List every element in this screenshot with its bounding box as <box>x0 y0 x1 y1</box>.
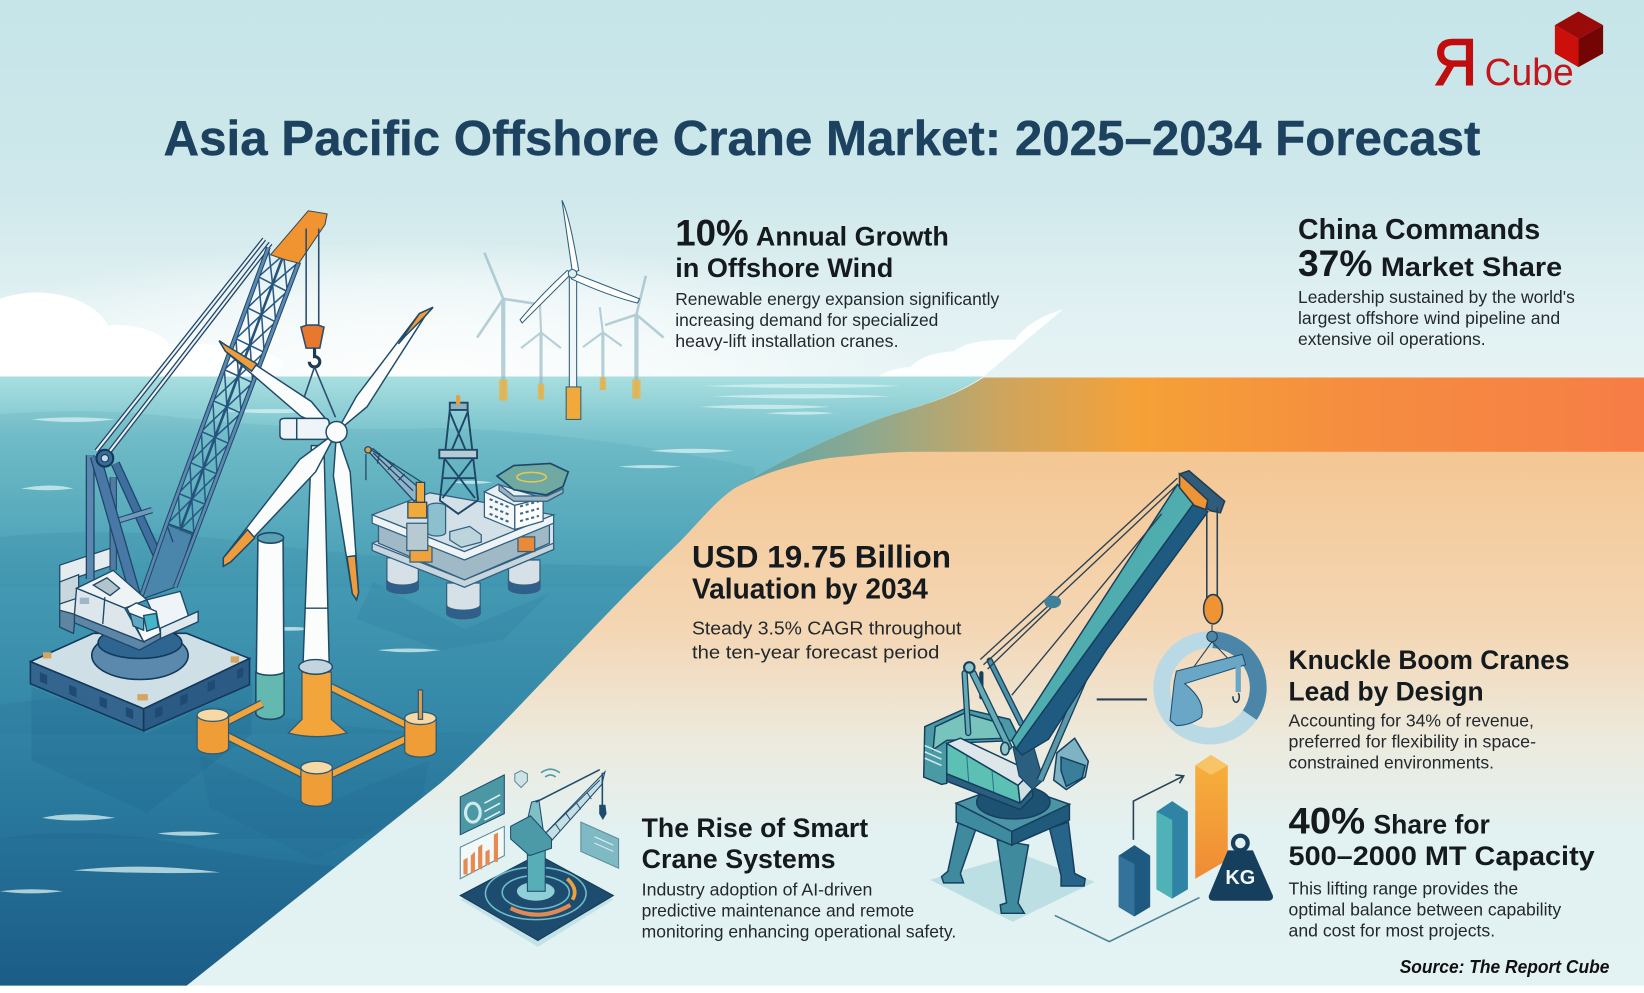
knuckle boom crane <box>924 471 1258 922</box>
stat: smart cranes <box>642 812 956 941</box>
hook block <box>1204 595 1223 624</box>
stat: knuckle boom: preferred for flexibility in space- <box>1289 732 1536 752</box>
stat: China share: China Commands <box>1298 213 1540 245</box>
stat: offshore wind growth: Annual Growth <box>756 220 949 251</box>
connector line <box>1097 698 1147 700</box>
sea <box>0 376 983 986</box>
logo cube <box>1555 12 1603 67</box>
helideck <box>497 463 568 501</box>
stay cables <box>980 478 1177 695</box>
stat: capacity share: optimal balance between capability <box>1289 899 1561 919</box>
stat: knuckle boom <box>1289 644 1570 773</box>
stat: China share: 37% <box>1298 243 1372 284</box>
floating foundation <box>197 672 436 806</box>
smart crane body <box>511 770 606 856</box>
boom strut <box>1040 664 1090 780</box>
standing tower section <box>256 533 284 719</box>
smart crane icon <box>460 769 619 947</box>
boom tip <box>271 211 327 263</box>
stat: valuation <box>692 539 962 663</box>
A-frame <box>90 450 172 599</box>
weight icon <box>1209 836 1273 901</box>
status panel <box>581 822 619 868</box>
stat: smart cranes: The Rise of Smart <box>642 812 868 843</box>
stat: knuckle boom: Lead by Design <box>1289 675 1484 706</box>
stat: China share <box>1298 213 1575 349</box>
stat: offshore wind growth <box>675 212 999 351</box>
wifi icon <box>541 769 560 777</box>
platform legs <box>387 558 540 619</box>
weight icon: KG <box>1225 867 1255 889</box>
stat: smart cranes: predictive maintenance and remote <box>642 900 914 920</box>
stat: valuation: Valuation by 2034 <box>692 573 928 605</box>
stat: capacity share: 500–2000 MT Capacity <box>1289 840 1596 871</box>
stat: China share: Leadership sustained by the world's <box>1298 287 1575 307</box>
stat: offshore wind growth: increasing demand for specialized <box>675 310 938 330</box>
turntable <box>92 627 188 679</box>
stat: capacity share: and cost for most projects. <box>1289 920 1495 940</box>
capacity chart icon <box>1055 755 1273 942</box>
shield icon <box>515 771 527 787</box>
boom base <box>1013 743 1043 790</box>
stat: valuation: USD 19.75 Billion <box>692 539 951 574</box>
logo: Cube <box>1485 51 1574 93</box>
stat: capacity share: 40% <box>1289 801 1365 842</box>
boom lattice <box>140 247 299 600</box>
title: Asia Pacific Offshore Crane Market: 2025–2034 Forecast <box>164 111 1480 166</box>
crane shadow <box>930 854 1095 922</box>
stat: smart cranes: Crane Systems <box>642 843 836 874</box>
main crane on barge <box>30 211 336 731</box>
crane rear block <box>60 548 110 633</box>
sea shading bands <box>0 411 755 986</box>
clouds <box>0 293 1063 389</box>
stat: valuation: Steady 3.5% CAGR throughout <box>692 617 962 638</box>
bars <box>1119 755 1228 916</box>
backstay cables <box>96 239 271 451</box>
stat: valuation: the ten-year forecast period <box>692 642 939 663</box>
upper deck <box>372 493 554 552</box>
deck tanks <box>428 503 446 536</box>
hook block <box>301 229 336 417</box>
stat: smart cranes: Industry adoption of AI-driven <box>642 879 872 899</box>
stat: capacity share <box>1289 801 1596 940</box>
boom tip <box>1180 471 1225 513</box>
stat: capacity share: This lifting range provides the <box>1289 878 1518 898</box>
stat: smart cranes: monitoring enhancing operational safety. <box>642 921 956 941</box>
crane A-frame <box>964 661 1021 755</box>
knuckle arm detail <box>1170 625 1246 726</box>
chart panel <box>460 826 504 879</box>
crane cab <box>924 709 1088 809</box>
stat: offshore wind growth: heavy-lift installation cranes. <box>675 331 899 351</box>
stat: knuckle boom: Accounting for 34% of revenue, <box>1289 711 1534 731</box>
teal boom <box>1012 484 1208 755</box>
deck crane <box>365 447 427 518</box>
dashboard panel <box>460 775 504 835</box>
growth arrow <box>1133 775 1184 840</box>
building <box>484 484 543 530</box>
crane house <box>74 570 198 650</box>
stat: knuckle boom: Knuckle Boom Cranes <box>1289 644 1570 675</box>
logo: Я <box>1433 25 1477 99</box>
band <box>734 377 1644 489</box>
foreground wind turbine <box>219 307 433 674</box>
hoist ropes <box>1207 508 1217 601</box>
background wind turbines <box>477 200 664 419</box>
sea highlights <box>0 384 902 893</box>
lower deck <box>372 521 554 587</box>
stat: capacity share: Share for <box>1373 809 1490 840</box>
oil platform <box>365 395 568 619</box>
between decks <box>378 523 549 580</box>
barge <box>30 633 250 731</box>
derrick <box>439 395 478 514</box>
axis <box>1055 898 1199 942</box>
stat: offshore wind growth: in Offshore Wind <box>675 252 893 283</box>
stat: knuckle boom: constrained environments. <box>1289 753 1494 773</box>
stat: China share: Market Share <box>1381 251 1562 282</box>
stat: China share: largest offshore wind pipeline and <box>1298 308 1560 328</box>
stat: offshore wind growth: Renewable energy expansion significantly <box>675 289 999 309</box>
source note: Source: The Report Cube <box>1400 956 1609 977</box>
logo <box>1433 12 1603 99</box>
stat: China share: extensive oil operations. <box>1298 329 1486 349</box>
detail ring <box>1162 640 1258 736</box>
crane pedestal <box>942 783 1085 913</box>
stat: offshore wind growth: 10% <box>675 212 749 253</box>
